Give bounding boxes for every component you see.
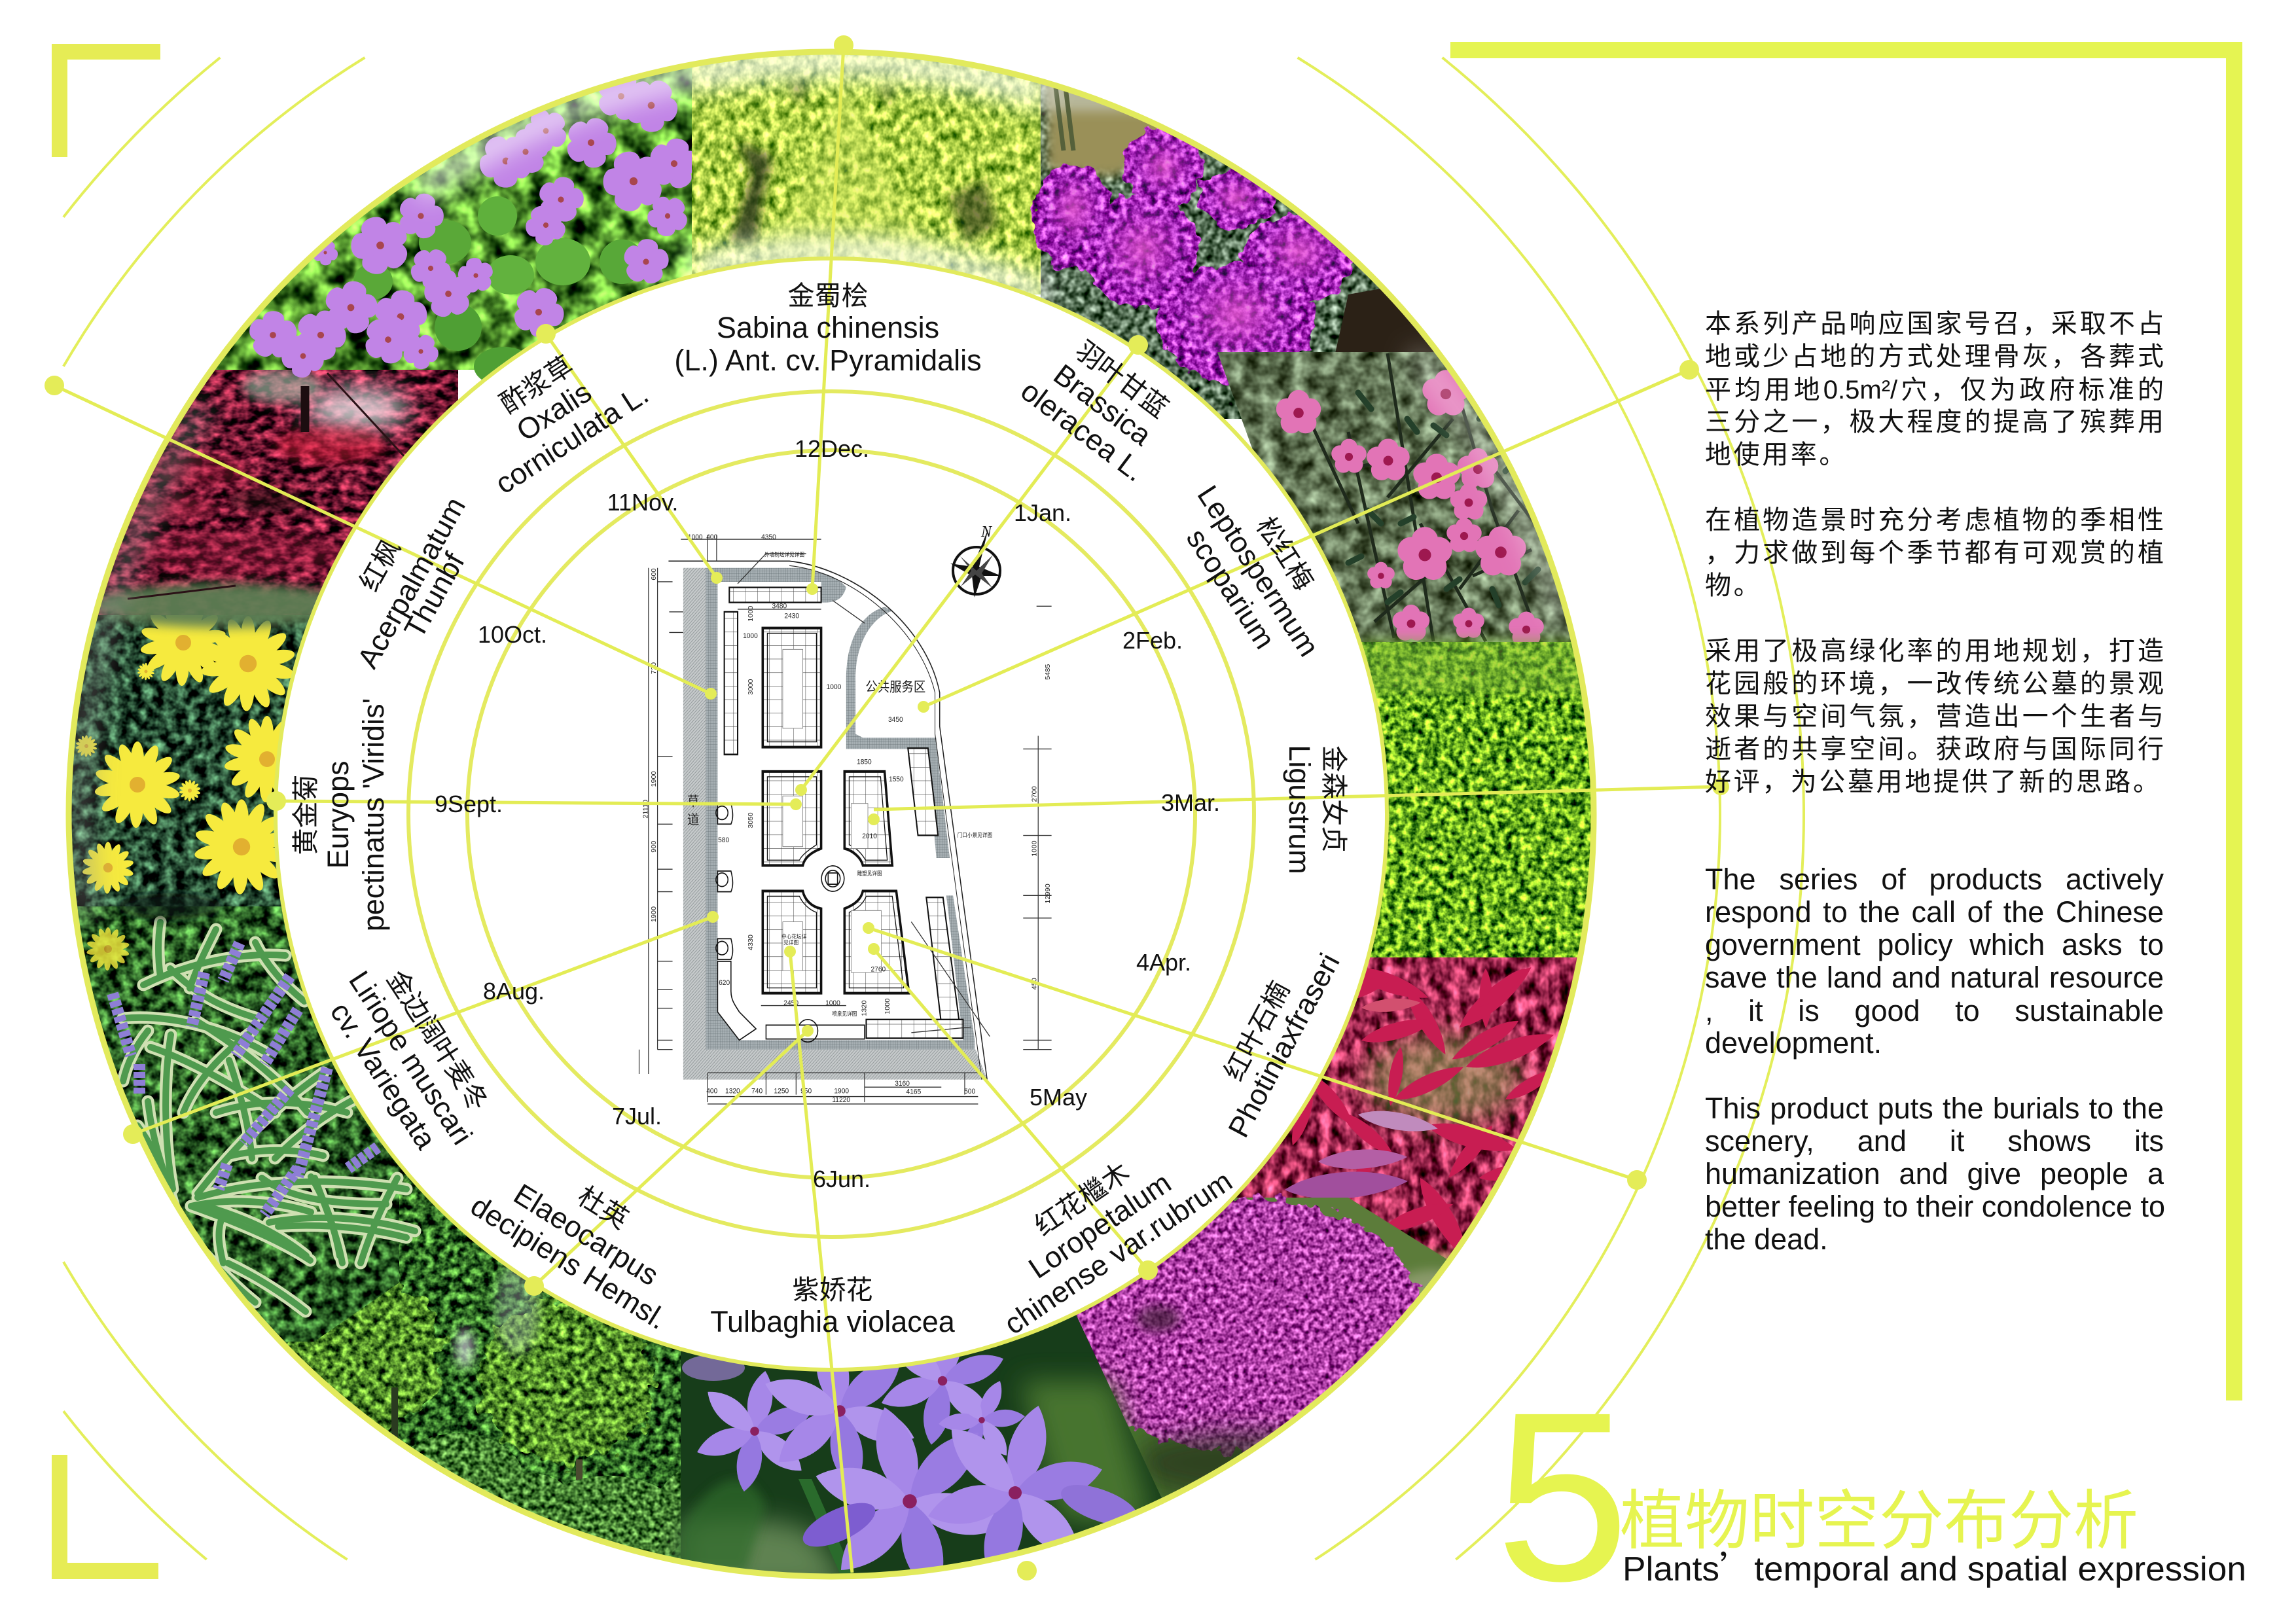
English description text (1705, 863, 2165, 1256)
label: Ligustrum: Ligustrum (1283, 745, 1316, 874)
plan text labels: 5485 (1045, 664, 1052, 680)
plan text labels: 见详图 (783, 939, 798, 946)
label: Leptospermum: 松红梅 (1250, 512, 1319, 596)
label: Oxalis: 酢浆草 (495, 350, 579, 419)
plan text labels: 12990 (1045, 883, 1052, 904)
label: Acer: 红枫 (354, 535, 406, 596)
plan text labels (643, 533, 1052, 1104)
label: Liriope: cv. Variegata (324, 996, 443, 1156)
plan text labels: 740 (751, 1087, 762, 1096)
plan text labels: 620 (719, 978, 730, 987)
plan text labels: 2700 (1031, 786, 1038, 802)
plan text labels: 公共服务区 (865, 680, 925, 695)
photo: Photinia red-tip leaves (1236, 957, 1577, 1259)
label: Ligustrum: 金森女贞 (1319, 745, 1349, 853)
plan text labels: 1000 (885, 998, 891, 1014)
label: Liriope: 金边阔叶麦冬 (381, 965, 494, 1116)
plan text labels: 950 (800, 1087, 812, 1096)
month ring: outer (408, 391, 1254, 1237)
Chinese description text: 花园般的环境，一改传统公墓的景观 (1705, 669, 2164, 698)
label: Ligustrum (1283, 745, 1349, 874)
label: Sabina: 金蜀桧 (788, 281, 868, 311)
plan text labels: 1000 (688, 533, 703, 541)
label: Loropetalum: 红花檵木 (1029, 1156, 1135, 1241)
white centre disc with inner ring (276, 259, 1387, 1370)
plan text labels: 1850 (857, 758, 872, 766)
photo: Brassica ornamental kale (1033, 59, 1446, 419)
plan text labels: 3000 (747, 679, 755, 695)
plan text labels: 720 (651, 662, 658, 674)
Chinese description text: 地或少占地的方式处理骨灰，各葬式 (1705, 342, 2164, 371)
frame bracket: bottom left (52, 1455, 158, 1579)
Chinese description text: 本系列产品响应国家号召，采取不占 (1705, 310, 2164, 338)
plan text labels: 1900 (834, 1087, 849, 1096)
icon: compass rose (950, 524, 1001, 597)
label: Euryops: pectinatus 'Viridis' (357, 698, 390, 931)
label: Euryops (291, 698, 390, 931)
plan text labels: 草 (687, 794, 699, 810)
label: Oxalis: corniculata L. (489, 377, 655, 501)
plan text labels: 4350 (761, 533, 776, 541)
plan text labels: 4165 (906, 1088, 921, 1096)
label: Brassica: Brassica (1047, 357, 1158, 452)
label: Tulbaghia: Tulbaghia violacea (710, 1305, 956, 1338)
leader lines from plants to plan (54, 45, 1721, 1573)
plan text labels: 1320 (725, 1087, 740, 1096)
label: Leptospermum: scoparium (1180, 523, 1282, 654)
plan text labels: 580 (718, 836, 729, 844)
plan text labels: 400 (706, 1087, 717, 1096)
label: Elaeocarpus: Elaeocarpus (508, 1177, 664, 1292)
plan text labels: 21110 (643, 800, 649, 819)
month labels: 3Mar. (1161, 789, 1220, 816)
plan text labels: 喷泉见详图 (832, 1010, 857, 1017)
plan text labels: 2430 (784, 612, 799, 620)
label: Leptospermum: Leptospermum (1191, 480, 1326, 662)
plan text labels: 1900 (651, 771, 658, 787)
soft white fades around photo edges (79, 62, 1564, 916)
label: Loropetalum: chinense var.rubrum (998, 1164, 1238, 1341)
photo: Leptospermum pink flowers (1217, 352, 1590, 645)
plan text labels: 1000 (825, 999, 840, 1007)
plan text labels: 外墙制坛详见详图 (764, 551, 804, 558)
Chinese description text: 好评，为公墓用地提供了新的思路。 (1705, 768, 2162, 796)
label: Leptospermum (1164, 463, 1351, 680)
label: Sabina (674, 281, 982, 377)
plan text labels: 450 (1031, 978, 1038, 990)
plan text labels: 11220 (832, 1096, 850, 1104)
label: Elaeocarpus: decipiens Hemsl. (465, 1188, 673, 1336)
photo: Elaeocarpus trees (249, 1152, 770, 1584)
plan text labels: 500 (964, 1087, 975, 1096)
Chinese description text: 逝者的共享空间。获政府与国际同行 (1705, 735, 2164, 764)
English description text: respond to the call of the Chinese (1705, 895, 2164, 929)
photo: Tulbaghia violet star flowers (681, 1306, 1165, 1620)
photo: Euryops yellow daisies (72, 615, 310, 971)
English description text: government policy which asks to (1705, 928, 2164, 961)
label: Acer: Acerpalmatum (351, 491, 472, 673)
English section title: Plants’temporal and spatial expression (1623, 1541, 2246, 1590)
label: Brassica (1014, 323, 1189, 488)
section number 5: 5 (1496, 1362, 1630, 1623)
plan text labels: 2450 (783, 999, 798, 1007)
label: Photinia: 红叶石楠 (1219, 976, 1295, 1086)
English description text: save the land and natural resource (1705, 961, 2164, 994)
label: Liriope: Liriope muscari (342, 965, 479, 1150)
English description text: better feeling to their condolence to (1705, 1190, 2165, 1223)
plan text labels: 门口小景见详图 (958, 831, 992, 838)
month labels: 4Apr. (1136, 949, 1191, 976)
plan text labels: 1320 (861, 1000, 868, 1016)
Chinese description text: 在植物造景时充分考虑植物的季相性 (1705, 506, 2164, 535)
label: Acer (321, 475, 495, 687)
month labels: 9Sept. (435, 791, 503, 817)
outer ring band (69, 52, 1594, 1577)
plan text labels: 1000 (747, 605, 755, 622)
label: Acer: Thunbf (397, 547, 471, 643)
label: Euryops: 黄金菊 (291, 775, 321, 855)
label: Elaeocarpus (465, 1135, 706, 1336)
plan text labels: 1000 (827, 683, 841, 691)
English description text: humanization and give people a (1705, 1157, 2164, 1190)
plan text labels: 3450 (888, 716, 903, 724)
Chinese description text (1705, 310, 2164, 796)
plant labels (291, 281, 1351, 1341)
label: Elaeocarpus: 杜英 (572, 1181, 634, 1235)
month labels: 11Nov. (607, 489, 678, 516)
plan text labels: 3480 (772, 602, 787, 611)
plan text labels: 600 (651, 568, 658, 580)
plan text labels: 1000 (1031, 840, 1038, 857)
decorative concentric arcs (63, 58, 1804, 1560)
English description text: scenery, and it shows its (1705, 1124, 2164, 1158)
photo: Sabina golden conifers (692, 55, 1041, 294)
plan text labels: 4330 (747, 935, 755, 950)
label: Tulbaghia (710, 1275, 956, 1338)
month labels: 7Jul. (612, 1103, 662, 1130)
plan text labels: 1250 (774, 1087, 789, 1096)
label: Brassica: oleracea L. (1014, 374, 1151, 488)
plan text labels: 1900 (651, 906, 658, 922)
frame bracket: top left (52, 44, 160, 157)
plan text labels: 中心花坛详 (781, 933, 806, 940)
month labels: 5May (1030, 1084, 1087, 1111)
photo: Oxalis purple flowers (215, 67, 692, 380)
month ring: inner (467, 450, 1195, 1178)
label: Sabina: Sabina chinensis (717, 311, 939, 344)
photo: Ligustrum bright green hedge (1361, 638, 1604, 957)
plan text labels: 1000 (743, 632, 758, 640)
photo: Acer red maple (85, 353, 458, 628)
label: Oxalis (455, 325, 655, 501)
label: Tulbaghia: 紫娇花 (792, 1275, 873, 1305)
Chinese section title: 植物时空分布分析 (1620, 1484, 2138, 1557)
Chinese description text: 平均用地0.5m²/穴，仅为政府标准的 (1705, 376, 2164, 404)
leader endpoint dots (45, 35, 1729, 1580)
Chinese description text: 效果与空间气氛，营造出一个生者与 (1705, 702, 2164, 731)
month labels: 1Jan. (1014, 499, 1071, 526)
plan text labels: 400 (706, 533, 717, 541)
photo: Liriope variegated blades and purple spikes (77, 906, 422, 1342)
photo: Loropetalum magenta shrub (1047, 1198, 1505, 1571)
month labels: 8Aug. (483, 978, 545, 1005)
panel: plant photo ring (46, 39, 1604, 1620)
plan text labels: 道 (687, 812, 699, 828)
English description text: the dead. (1705, 1222, 1828, 1256)
label: Loropetalum: Loropetalum (1022, 1166, 1177, 1285)
icon: compass rose: N (980, 524, 993, 541)
label: Sabina: (L.) Ant. cv. Pyramidalis (674, 344, 982, 377)
label: Oxalis: Oxalis (511, 375, 598, 448)
plan text labels: 雕塑见详图 (857, 870, 882, 876)
month labels: 6Jun. (813, 1166, 870, 1192)
Chinese description text: 三分之一，极大程度的提高了殡葬用 (1705, 408, 2164, 437)
English description text: , it is good to sustainable (1705, 994, 2164, 1027)
plan text labels: 3050 (747, 812, 755, 829)
plan text labels: 900 (651, 840, 658, 853)
English description text: development. (1705, 1026, 1882, 1060)
English description text: The series of products actively (1705, 863, 2164, 896)
plan text labels: 2010 (862, 832, 877, 840)
plan text labels: 2760 (870, 965, 886, 973)
label: Euryops: Euryops (321, 760, 355, 869)
English description text: This product puts the burials to the (1705, 1092, 2164, 1125)
label: Brassica: 羽叶甘蓝 (1070, 335, 1174, 423)
plan text labels: 3160 (895, 1079, 910, 1088)
Chinese description text: ，力求做到每个季节都有可观赏的植 (1705, 539, 2164, 567)
label: Liriope (315, 948, 505, 1168)
plan text labels: 1550 (889, 775, 904, 783)
label: Loropetalum (963, 1112, 1238, 1341)
frame bracket: top right (1450, 42, 2242, 1400)
month labels (435, 435, 1220, 1192)
Chinese description text: 采用了极高绿化率的用地规划，打造 (1705, 637, 2164, 666)
month labels: 12Dec. (795, 435, 869, 462)
site master plan drawing (639, 533, 1052, 1104)
label: Photinia: Photiniaxfraseri (1221, 948, 1346, 1143)
month labels: 10Oct. (478, 621, 547, 648)
month labels: 2Feb. (1122, 627, 1183, 654)
Chinese description text: 物。 (1705, 571, 1762, 600)
Chinese description text: 地使用率。 (1705, 440, 1848, 469)
